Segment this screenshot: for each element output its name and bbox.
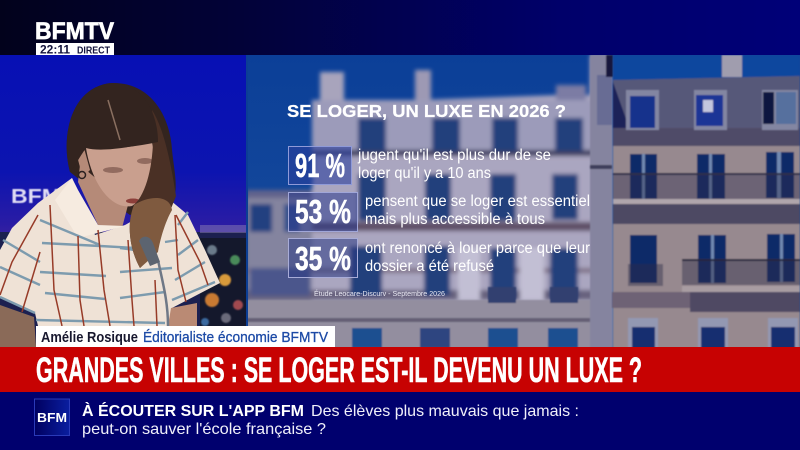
name strap: Éditorialiste économie BFMTV xyxy=(143,329,328,346)
microphone xyxy=(158,260,168,326)
ticker text: À ÉCOUTER SUR L'APP BFM xyxy=(82,401,304,420)
panel: building photo xyxy=(246,55,800,350)
stat row: 91 %: jugent qu'il est plus dur de se xyxy=(357,147,551,164)
channel logo: 22:11 xyxy=(40,44,71,56)
stat row: 91 %: 91 % xyxy=(295,147,345,184)
heading: SE LOGER, UN LUXE EN 2026 ? xyxy=(287,101,566,121)
hair front strand xyxy=(130,110,176,268)
studio city lights xyxy=(0,225,246,347)
stat row: 35 % xyxy=(288,238,590,278)
ticker text xyxy=(82,401,579,438)
panel: statistics xyxy=(287,101,590,298)
lower windows xyxy=(630,234,795,283)
channel logo: DIRECT xyxy=(77,44,110,56)
stat row: 53 %: 53 % xyxy=(295,193,351,230)
lower row of windows, sharper xyxy=(246,55,613,350)
left building windows xyxy=(350,118,583,300)
vertical stripes xyxy=(0,205,208,326)
name strap: Amélie Rosique xyxy=(41,330,138,346)
presenter xyxy=(0,83,220,347)
stat row: 53 % xyxy=(288,192,590,232)
neck xyxy=(78,165,128,228)
ghost studio logo: BFM xyxy=(11,186,61,208)
top header bar xyxy=(0,0,800,55)
bottom windows xyxy=(628,318,798,350)
horizontal stripes xyxy=(0,212,215,323)
stat row: 91 % xyxy=(288,146,551,184)
stat row: 35 %: dossier a été refusé xyxy=(365,258,494,275)
upper balcony xyxy=(613,173,800,175)
stat row: 91 %: loger qu'il y a 10 ans xyxy=(358,165,491,182)
ticker text: Des élèves plus mauvais que jamais : xyxy=(311,403,579,420)
channel logo: BFMTV xyxy=(35,18,114,45)
lower balcony xyxy=(682,260,800,285)
collar xyxy=(55,178,125,238)
shirt xyxy=(0,178,220,326)
arms xyxy=(0,305,36,347)
stat row: 35 %: 35 % xyxy=(295,240,351,277)
panel: studio background xyxy=(0,55,246,347)
earring xyxy=(78,172,86,178)
icon: BFM logo xyxy=(34,399,70,436)
icon: BFM logo: BFM xyxy=(37,410,67,425)
upper windows xyxy=(630,152,794,200)
ticker text: peut-on sauver l'école française ? xyxy=(82,421,326,438)
stat row: 35 %: ont renoncé à louer parce que leur xyxy=(365,240,590,257)
bottom ticker xyxy=(0,392,800,450)
channel logo xyxy=(35,18,114,56)
dormer windows xyxy=(626,90,659,130)
source note: Étude Leocare-Discurv - Septembre 2026 xyxy=(314,289,445,298)
stat row: 53 %: mais plus accessible à tous xyxy=(365,211,545,228)
forehead hair xyxy=(67,83,158,172)
hair back xyxy=(67,83,176,215)
face xyxy=(86,142,154,206)
left building blurred xyxy=(246,55,612,350)
name strap xyxy=(36,326,335,347)
pale shutters xyxy=(458,248,544,300)
right building xyxy=(612,55,800,350)
blue divider between studio and photo xyxy=(246,55,248,347)
stat row: 53 %: pensent que se loger est essentiel xyxy=(365,193,590,210)
